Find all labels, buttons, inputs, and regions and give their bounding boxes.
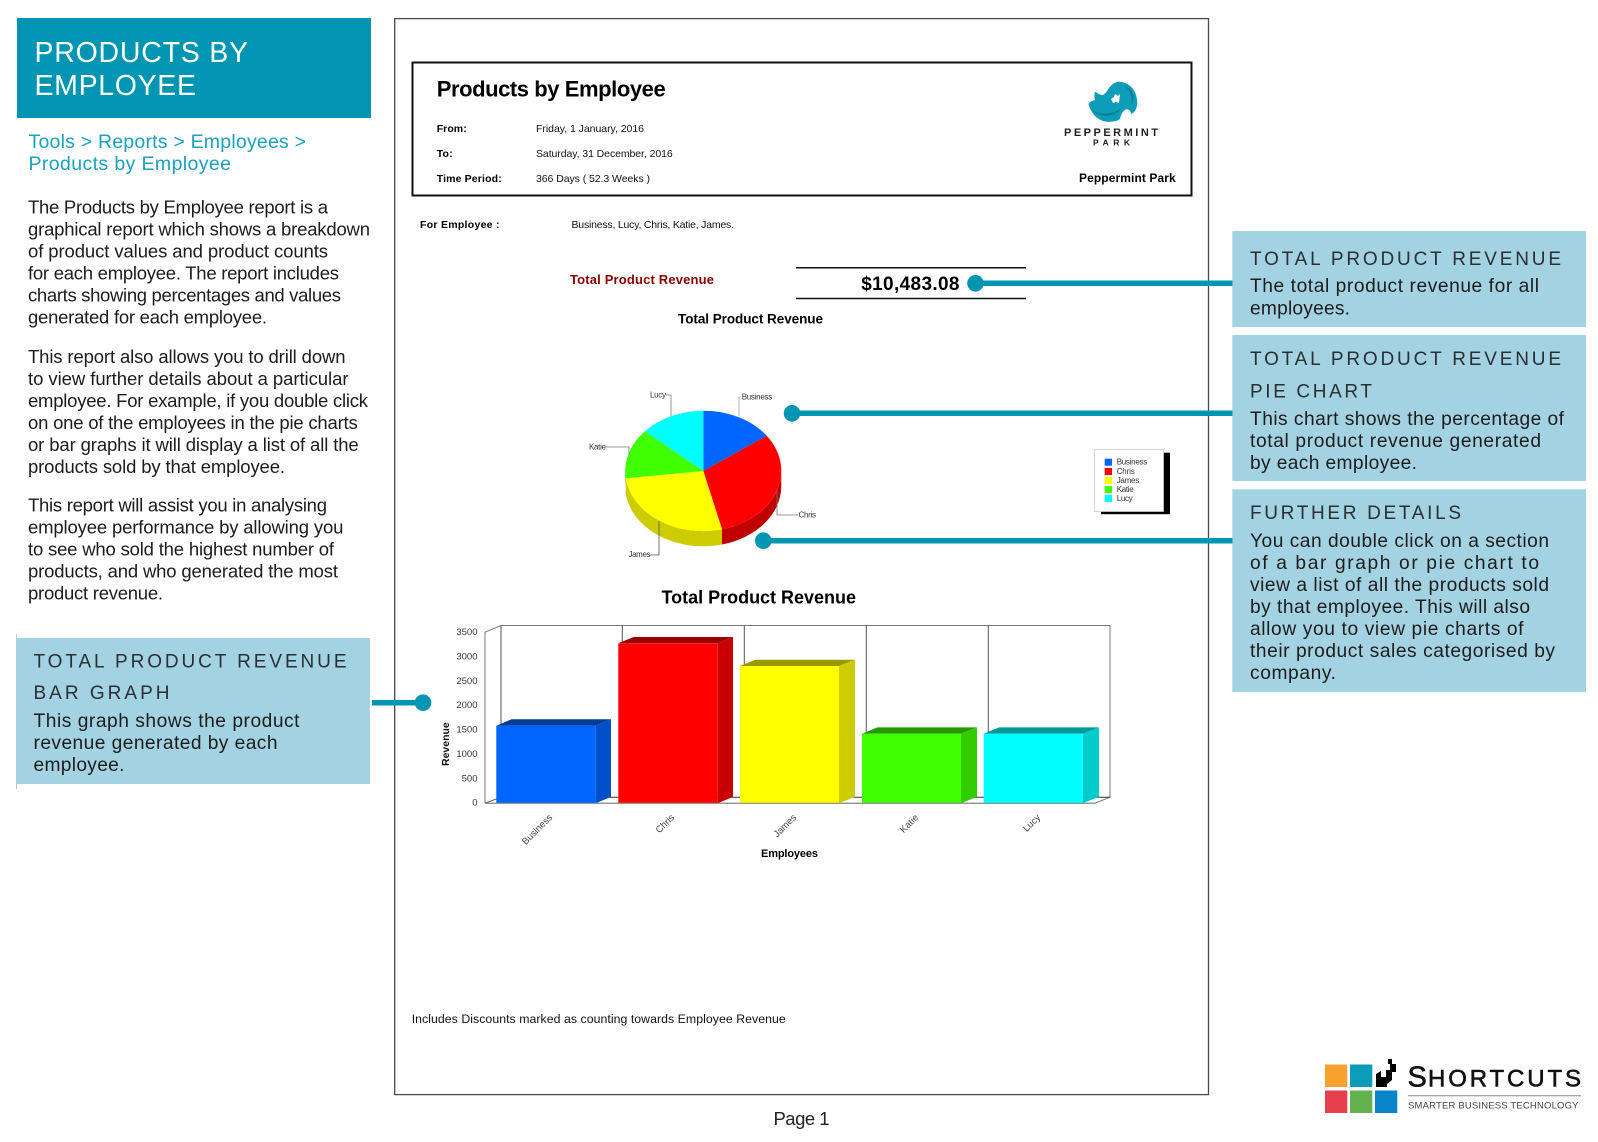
callout: total product revenue [1232, 231, 1586, 327]
bar: Business [496, 719, 611, 803]
text block: drill down: on one of the employees in the pie charts [28, 412, 358, 433]
callout: total product revenue pie chart: by each employee. [1250, 453, 1417, 474]
text block: introduction: of product values and product counts [28, 240, 328, 261]
pie chart legend: Chris [1117, 467, 1135, 476]
connector: bar graph [372, 694, 431, 711]
text block: introduction: graphical report which shows a breakdown [28, 218, 370, 239]
callout: total product revenue bar graph: revenue generated by each [34, 733, 278, 754]
text block: analysis: products, and who generated the most [28, 560, 338, 582]
breadcrumb navigation path: Tools > Reports > Employees > [28, 131, 306, 153]
callout: total product revenue: employees. [1250, 298, 1350, 319]
callout: further details: You can double click on a section [1250, 531, 1549, 552]
callout: total product revenue: The total product revenue for all [1250, 276, 1539, 297]
title banner [17, 18, 371, 118]
x axis title: Employees [761, 848, 818, 860]
logo: Peppermint Park: PEPPERMINT [1064, 127, 1158, 139]
logo: Shortcuts: HORTCUTS [1428, 1066, 1581, 1093]
chart frame [485, 626, 1110, 803]
pie labels: Lucy [650, 391, 666, 400]
bar chart title: Total Product Revenue [662, 588, 856, 608]
total product revenue value: Total Product Revenue [570, 272, 714, 287]
callout: further details: view a list of all the products sold [1250, 575, 1549, 596]
breadcrumb navigation path [28, 131, 306, 175]
text block: drill down: to view further details about a particular [28, 368, 348, 389]
report header box: Saturday, 31 December, 2016 [536, 148, 673, 160]
x axis labels: Katie [898, 812, 921, 835]
text block: analysis: to see who sold the highest number of [28, 538, 335, 560]
text block: introduction: The Products by Employee report is a [28, 196, 329, 217]
y axis labels: 0 [472, 798, 478, 809]
pie chart title: Total Product Revenue [678, 312, 823, 326]
callout: total product revenue bar graph: BAR GRAPH [34, 683, 170, 704]
bar chart [440, 626, 1110, 860]
pie chart [589, 391, 816, 559]
callout: further details: by that employee. This will also [1250, 597, 1530, 618]
title banner: PRODUCTS BY [34, 37, 248, 69]
report header box: Time Period: [437, 173, 502, 185]
slice: Chris [703, 436, 781, 529]
callout: further details: of a bar graph or pie chart to [1250, 553, 1539, 574]
y axis labels [456, 627, 478, 809]
y axis labels: 500 [462, 774, 478, 785]
callout: total product revenue pie chart [1232, 335, 1586, 481]
slice: Business [703, 411, 767, 471]
callout: further details: allow you to view pie charts of [1250, 619, 1524, 640]
footnote: Includes Discounts marked as counting towards Employee Revenue [412, 1012, 786, 1026]
logo: Peppermint Park: PARK [1093, 138, 1131, 148]
pie labels: Business [742, 392, 772, 402]
total product revenue value [570, 268, 1026, 298]
connector: further details [755, 532, 1232, 549]
callout: total product revenue pie chart: total product revenue generated [1250, 431, 1541, 452]
pie labels [589, 391, 816, 559]
logo: Peppermint Park [1064, 82, 1158, 148]
report header box: Friday, 1 January, 2016 [536, 123, 644, 135]
callout: further details: company. [1250, 663, 1336, 684]
pie chart legend [1094, 450, 1170, 514]
bar: Lucy [984, 727, 1099, 803]
x axis labels: James [772, 812, 799, 840]
y axis title: Revenue [440, 722, 452, 766]
report header box: From: [437, 123, 467, 135]
pie labels: Katie [589, 442, 607, 451]
report header box: Peppermint Park [1079, 171, 1176, 185]
text block: introduction: for each employee. The report includes [28, 262, 339, 283]
slice: Katie [625, 431, 703, 478]
breadcrumb navigation path: Products by Employee [28, 153, 231, 175]
callout: total product revenue bar graph: employee. [34, 755, 124, 776]
pie side walls [625, 471, 781, 546]
callout: further details: FURTHER DETAILS [1250, 503, 1461, 524]
text block: analysis: product revenue. [28, 582, 163, 604]
text block: analysis: employee performance by allowing you [28, 516, 343, 538]
callout: total product revenue pie chart: TOTAL PRODUCT REVENUE [1250, 349, 1561, 370]
y axis labels: 1500 [456, 724, 478, 736]
bar: Chris [618, 637, 733, 803]
pie labels: Chris [798, 510, 816, 519]
report header box [412, 62, 1192, 196]
pie chart legend: Katie [1117, 485, 1134, 494]
text block: introduction: generated for each employee. [28, 306, 267, 327]
slice: Lucy [645, 411, 703, 471]
callout: total product revenue: TOTAL PRODUCT REVENUE [1250, 249, 1561, 270]
callout: total product revenue bar graph: This graph shows the product [34, 711, 300, 732]
text block: drill down: or bar graphs it will display a list of all the [28, 434, 359, 455]
text block: introduction: charts showing percentages and values [28, 284, 341, 305]
y axis labels: 3000 [456, 652, 478, 662]
pie chart legend: Business [1117, 458, 1147, 467]
connector: pie chart [784, 405, 1232, 422]
title banner: EMPLOYEE [34, 70, 196, 102]
connector: total product revenue [967, 275, 1232, 292]
text block: introduction [28, 196, 370, 327]
x axis labels: Chris [654, 812, 677, 836]
callout: total product revenue pie chart: This chart shows the percentage of [1250, 409, 1565, 430]
y axis labels: 2000 [456, 700, 478, 711]
bar: Katie [862, 727, 977, 803]
callout: total product revenue pie chart: PIE CHART [1250, 381, 1372, 402]
y axis labels: 2500 [456, 676, 478, 687]
panel: report page frame [395, 19, 1208, 1095]
x axis labels: Business [520, 812, 555, 847]
pie chart legend: Lucy [1117, 494, 1133, 503]
logo: Shortcuts: S [1408, 1062, 1427, 1094]
employee filter: Business, Lucy, Chris, Katie, James. [572, 219, 734, 231]
y axis labels: 3500 [456, 627, 478, 638]
callout: total product revenue bar graph [16, 634, 370, 789]
text block: drill down: products sold by that employee. [28, 456, 285, 477]
x axis labels: Lucy [1021, 812, 1043, 834]
pie labels: James [628, 550, 650, 559]
slice: James [626, 471, 722, 531]
text block: analysis [28, 494, 343, 604]
text block: drill down: employee. For example, if you double click [28, 390, 369, 411]
callout: further details [1232, 489, 1586, 692]
logo: Shortcuts: SMARTER BUSINESS TECHNOLOGY [1408, 1100, 1579, 1111]
text block: drill down [28, 346, 369, 477]
x axis labels [520, 812, 1043, 847]
y axis labels: 1000 [456, 749, 478, 760]
report header box: To: [437, 148, 453, 160]
employee filter [420, 219, 734, 231]
report header box: Products by Employee [437, 77, 666, 102]
pie chart legend: James [1117, 476, 1139, 485]
text block: drill down: This report also allows you to drill down [28, 346, 346, 367]
text block: analysis: This report will assist you in analysing [28, 494, 327, 516]
bar: James [740, 660, 855, 803]
report header box: 366 Days ( 52.3 Weeks ) [536, 173, 650, 185]
page number: Page 1 [774, 1108, 830, 1129]
callout: further details: their product sales categorised by [1250, 641, 1555, 662]
employee filter: For Employee : [420, 219, 500, 231]
logo: Shortcuts [1325, 1059, 1581, 1113]
total product revenue value: $10,483.08 [861, 274, 960, 295]
callout: total product revenue bar graph: TOTAL PRODUCT REVENUE [34, 652, 346, 673]
